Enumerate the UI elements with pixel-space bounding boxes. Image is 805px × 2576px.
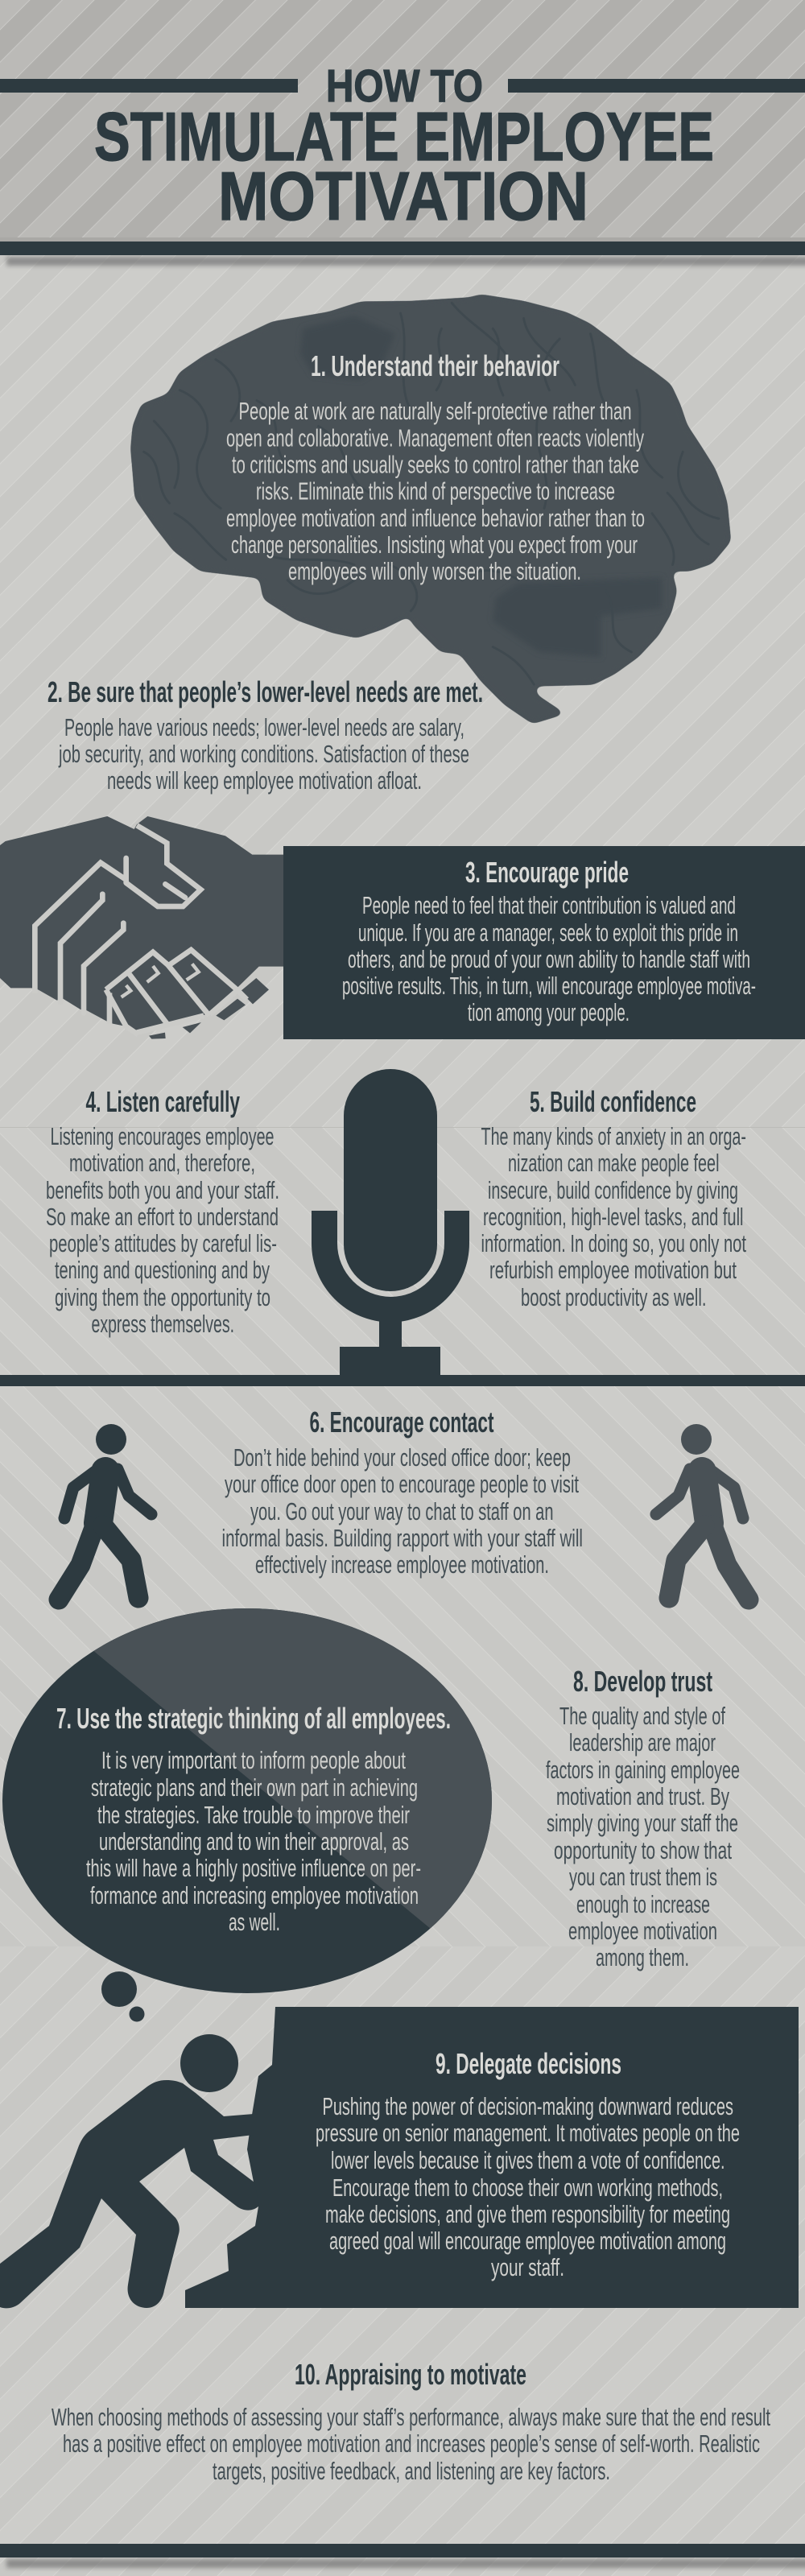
divider bar <box>0 1375 805 1386</box>
text block 7: formance and increasing employee motivation <box>90 1881 419 1909</box>
text block 8 <box>546 1702 740 1971</box>
text block 4: motivation and, therefore, <box>69 1149 255 1177</box>
section 2: lower-level needs <box>47 675 483 795</box>
text block 7 <box>86 1746 421 1936</box>
heading 3: 3. Encourage pride <box>465 856 629 889</box>
text block 9: your staff. <box>491 2253 564 2281</box>
text block 4: benefits both you and your staff. <box>46 1176 279 1204</box>
text block 4: So make an effort to understand <box>46 1203 279 1231</box>
text block 7: this will have a highly positive influence on per- <box>86 1854 421 1882</box>
text block 7: the strategies. Take trouble to improve their <box>97 1801 410 1829</box>
text block 4 <box>46 1122 279 1338</box>
text block 7: strategic plans and their own part in achieving <box>91 1773 418 1802</box>
text block 4: tening and questioning and by <box>55 1256 270 1284</box>
text block 7: understanding and to win their approval, as <box>99 1827 409 1856</box>
text block 5: boost productivity as well. <box>521 1283 707 1311</box>
text block 4: express themselves. <box>92 1310 234 1338</box>
text block 3: tion among your people. <box>468 998 630 1026</box>
icon: brain <box>133 296 729 722</box>
text block 6: effectively increase employee motivation. <box>255 1550 549 1579</box>
heading 9: 9. Delegate decisions <box>436 2047 621 2080</box>
panel: delegate decisions, rock <box>0 2007 799 2308</box>
icon: walking figure right <box>656 1424 749 1600</box>
icon: walking figure left <box>59 1424 151 1600</box>
section 4: listen carefully <box>46 1085 279 1338</box>
section 5: build confidence <box>481 1085 746 1311</box>
text block 8: enough to increase <box>576 1890 710 1918</box>
text block 1 <box>226 397 645 585</box>
text block 2: People have various needs; lower-level needs are salary, <box>64 713 464 741</box>
text block 4: Listening encourages employee <box>50 1122 274 1150</box>
title: MOTIVATION <box>218 159 588 235</box>
icon: handshake <box>0 816 284 1039</box>
panel: encourage pride <box>283 846 805 1039</box>
text block 6 <box>222 1443 583 1579</box>
text block 3 <box>342 891 756 1026</box>
header banner <box>0 0 805 266</box>
heading 6: 6. Encourage contact <box>309 1406 494 1439</box>
text block 10 <box>52 2403 770 2485</box>
icon: thought bubble dots <box>101 1971 145 2022</box>
text block 1: risks. Eliminate this kind of perspective to increase <box>256 477 615 506</box>
heading 2: 2. Be sure that people’s lower-level needs are met. <box>47 675 483 708</box>
title <box>94 60 714 235</box>
text block 6: informal basis. Building rapport with your staff will <box>222 1524 583 1552</box>
text block 5 <box>481 1122 746 1311</box>
icon: man pushing rock <box>0 2034 259 2308</box>
heading 10: 10. Appraising to motivate <box>295 2358 526 2391</box>
text block 8: employee motivation <box>568 1917 717 1945</box>
heading 7: 7. Use the strategic thinking of all employees. <box>56 1702 451 1735</box>
section 10: appraising to motivate <box>52 2358 770 2485</box>
title: HOW TO <box>326 60 483 112</box>
icon: microphone <box>312 1069 469 1376</box>
heading 5: 5. Build confidence <box>530 1085 696 1118</box>
heading 4: 4. Listen carefully <box>85 1085 240 1118</box>
text block 2: needs will keep employee motivation afloat. <box>107 766 422 795</box>
section 6: encourage contact <box>222 1406 583 1579</box>
text block 9 <box>316 2092 740 2281</box>
text block 7: It is very important to inform people about <box>101 1746 406 1774</box>
text block 4: giving them the opportunity to <box>55 1283 270 1311</box>
text block 6: your office door open to encourage people to visit <box>225 1470 579 1498</box>
section 1: understand their behavior <box>226 349 645 585</box>
text block 6: you. Go out your way to chat to staff on an <box>250 1497 554 1525</box>
text block 8: leadership are major <box>569 1728 716 1757</box>
text block 6: Don’t hide behind your closed office door; keep <box>233 1443 571 1472</box>
text block 1: employees will only worsen the situation. <box>288 557 581 585</box>
section 8: develop trust <box>546 1665 740 1971</box>
text block 7: as well. <box>229 1908 280 1936</box>
text block 8: among them. <box>596 1943 689 1971</box>
text block 8: you can trust them is <box>569 1863 717 1891</box>
heading 1: 1. Understand their behavior <box>311 349 559 382</box>
text block 4: people’s attitudes by careful lis- <box>49 1229 277 1257</box>
text block 2: job security, and working conditions. Satisfaction of these <box>58 740 469 768</box>
footer bar <box>0 2544 805 2568</box>
heading 8: 8. Develop trust <box>573 1665 712 1698</box>
text block 2 <box>58 713 469 795</box>
panel: thought bubble, strategic thinking <box>2 1600 499 2022</box>
